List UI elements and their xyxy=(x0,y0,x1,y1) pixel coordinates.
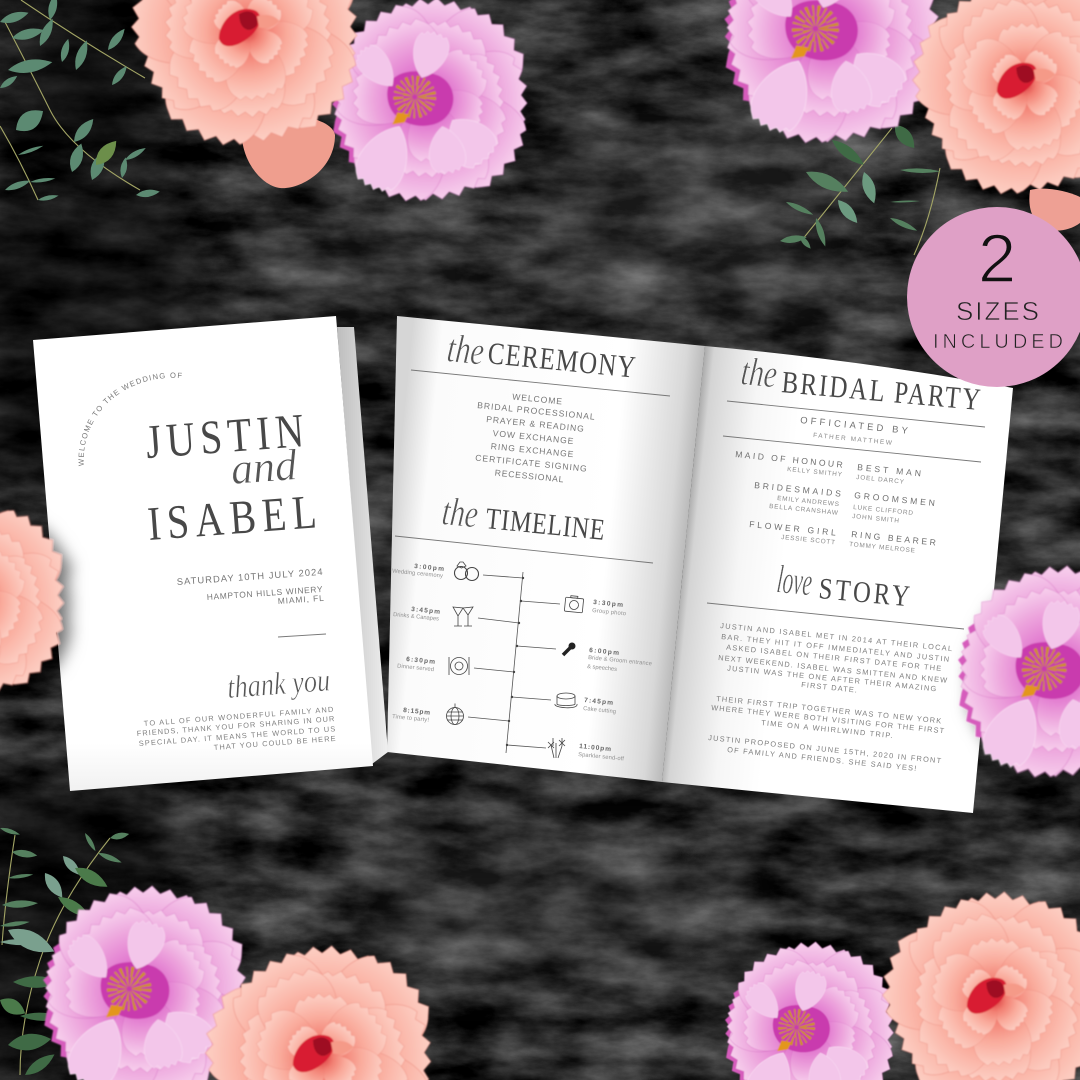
entry: 7:45pm cake cutting xyxy=(583,697,616,715)
icon: microphone xyxy=(563,642,576,655)
entry: 7:45pm cake cutting: Cake cutting xyxy=(583,706,616,715)
text block: ceremony order xyxy=(475,392,595,484)
text block: bridal party names: JESSIE SCOTT xyxy=(781,534,835,546)
entry: 11:00pm sparkler send-off: Sparkler send-off xyxy=(578,752,625,763)
text block: ceremony order: RING EXCHANGE xyxy=(490,441,574,459)
text block: thank you message: FRIENDS, THANK YOU FOR SHARING IN OUR xyxy=(136,714,335,738)
panel: front cover card xyxy=(33,316,373,791)
icon: cake xyxy=(555,693,577,708)
entry: 7:45pm cake cutting: 7:45pm xyxy=(584,697,613,707)
text block: bridal party names: BELLA CRANSHAW xyxy=(769,503,839,517)
heading: the timeline: the xyxy=(440,488,480,537)
entry: 6:30pm dinner served: Dinner served xyxy=(397,664,434,673)
text block: bridal party names: EMILY ANDREWS xyxy=(777,495,839,508)
text block: love story: NEXT WEEKEND. ISABEL WAS SMITTEN AND KNEW xyxy=(718,653,948,685)
entry: 6:00pm bride and groom entrance: Bride & Groom entrance xyxy=(588,655,652,667)
chart: wedding day timeline xyxy=(392,562,652,763)
text block: ceremony order: VOW EXCHANGE xyxy=(492,428,574,446)
text block: bridal party names: GROOMSMEN xyxy=(854,490,935,508)
heading: the bridal party xyxy=(739,348,982,418)
text block: love story: ASKED ISABEL ON THEIR FIRST DATE FOR THE xyxy=(726,643,942,673)
text block: date and venue: MIAMI, FL xyxy=(277,593,324,606)
text block: ceremony order: RECESSIONAL xyxy=(494,468,564,484)
heading: love story xyxy=(775,556,911,613)
flower: peach peony bottom left xyxy=(195,940,445,1080)
entry: 3:00pm wedding ceremony: Wedding ceremony xyxy=(392,569,443,580)
arched text: welcome to the wedding of: WELCOME TO THE WEDDING OF xyxy=(78,372,182,466)
heading: couple names: ISABEL xyxy=(146,486,318,551)
flower: peach peony bottom right xyxy=(873,886,1080,1080)
text block: thank you message: THAT YOU COULD BE HERE xyxy=(213,734,336,752)
text block: thank you message xyxy=(136,705,336,752)
heading: the ceremony: the xyxy=(445,325,486,374)
flower: pink peony bottom left xyxy=(31,880,259,1080)
heading: the bridal party: BRIDAL PARTY xyxy=(780,366,982,418)
flower: peach peony top right xyxy=(903,0,1080,208)
entry: 6:30pm dinner served: 6:30pm xyxy=(406,656,435,666)
icon: disco ball xyxy=(446,704,464,724)
heading: the timeline xyxy=(440,488,606,546)
text block: ceremony order: PRAYER & READING xyxy=(486,414,585,434)
petal: peach peony lower petal xyxy=(242,116,335,188)
badge: 2 sizes included: INCLUDED xyxy=(933,331,1063,353)
heading: the ceremony xyxy=(445,325,637,385)
entry: 3:45pm drinks and canapes: Drinks & Canapes xyxy=(393,612,439,623)
text block: bridal party names: BRIDESMAIDS xyxy=(754,480,842,499)
heading: thank you: thank you xyxy=(226,661,331,705)
heading: the timeline: TIMELINE xyxy=(484,502,606,546)
text block: bridal party names: LUKE CLIFFORD xyxy=(853,504,914,517)
badge: 2 sizes included: 2 xyxy=(978,220,1016,297)
icon: sparklers xyxy=(548,738,565,758)
text block: thank you message: TO ALL OF OUR WONDERFUL FAMILY AND xyxy=(143,705,334,728)
eucalyptus branch: top right xyxy=(779,121,941,255)
heading: love story: STORY xyxy=(817,572,911,613)
icon: cocktails xyxy=(453,607,473,626)
text block: date and venue: SATURDAY 10TH JULY 2024 xyxy=(176,566,323,587)
text block: bridal party names xyxy=(735,449,936,555)
text block: love story: JUSTIN WAS THE ONE AFTER THEIR AMAZING xyxy=(727,664,937,693)
text block: love story: TIME ON A WHIRLWIND TRIP. xyxy=(761,718,893,740)
text block: officiated by: FATHER MATTHEW xyxy=(813,432,893,447)
entry: 3:00pm wedding ceremony: 3:00pm xyxy=(414,563,444,573)
text block: love story: WHERE THEY WERE BOTH VISITING FOR THE FIRST xyxy=(711,703,945,735)
text block: love story: BAR. THEY HIT IT OFF IMMEDIATELY AND JUSTIN xyxy=(721,632,950,664)
panel: booklet left page xyxy=(387,316,705,782)
text block: love story: JUSTIN PROPOSED ON JUNE 15TH, 2020 IN FRONT xyxy=(708,733,942,765)
entry: 3:45pm drinks and canapes: 3:45pm xyxy=(411,606,440,616)
entry: 8:15pm time to party: 8:15pm xyxy=(403,707,430,717)
flower: pink peony top left xyxy=(320,0,540,214)
text block: love story: FIRST DATE. xyxy=(801,680,857,695)
text block: love story xyxy=(708,621,953,773)
entry: 8:15pm time to party: Time to party! xyxy=(392,714,430,724)
entry: 3:30pm group photo: 3:30pm xyxy=(593,599,623,609)
heading: the bridal party: the xyxy=(739,348,779,397)
text block: date and venue xyxy=(176,566,324,606)
entry: 3:45pm drinks and canapes xyxy=(393,606,440,623)
text block: love story: OF FAMILY AND FRIENDS. SHE SAID YES! xyxy=(727,745,917,773)
text block: bridal party names: JOHN SMITH xyxy=(852,513,900,525)
text block: officiated by xyxy=(800,414,909,447)
text block: bridal party names: BEST MAN xyxy=(857,462,921,478)
text block: bridal party names: MAID OF HONOUR xyxy=(735,449,843,470)
entry: 6:00pm bride and groom entrance xyxy=(587,647,652,673)
flower: peach peony left edge xyxy=(0,497,76,711)
icon: wedding rings xyxy=(454,562,478,580)
flower: pink peony bottom right xyxy=(715,937,905,1080)
flower: peach peony top left xyxy=(121,0,371,159)
text block: ceremony order: BRIDAL PROCESSIONAL xyxy=(477,400,595,422)
text block: thank you message: SPECIAL DAY. IT MEANS THE WORLD TO US xyxy=(138,724,336,748)
text block: ceremony order: WELCOME xyxy=(512,392,563,406)
flower: pink peony top right xyxy=(712,0,953,157)
heading: the ceremony: CEREMONY xyxy=(486,337,637,385)
badge: 2 sizes included xyxy=(907,207,1080,387)
petal: peach peony lower right xyxy=(1029,189,1080,231)
text block: bridal party names: TOMMY MELROSE xyxy=(849,541,915,555)
icon: plate and cutlery xyxy=(449,657,469,675)
flower: pink peony right edge xyxy=(946,560,1080,790)
booklet back page strip xyxy=(337,327,388,764)
text block: bridal party names: KELLY SMITHY xyxy=(787,466,843,479)
heading: couple names xyxy=(144,405,318,551)
text block: bridal party names: RING BEARER xyxy=(851,529,936,547)
heading: couple names: and xyxy=(229,440,300,494)
heading: love story: love xyxy=(775,556,814,604)
entry: 6:30pm dinner served xyxy=(397,656,435,673)
text block: date and venue: HAMPTON HILLS WINERY xyxy=(206,584,323,602)
entry: 8:15pm time to party xyxy=(392,707,430,724)
text block: officiated by: OFFICIATED BY xyxy=(800,414,909,436)
heading: couple names: JUSTIN xyxy=(144,405,306,469)
text block: love story: THEIR FIRST TRIP TOGETHER WAS TO NEW YORK xyxy=(716,694,942,725)
text block: bridal party names: FLOWER GIRL xyxy=(749,519,837,538)
text block: bridal party names: JOEL DARCY xyxy=(856,474,905,486)
entry: 6:00pm bride and groom entrance: & speeches xyxy=(587,664,617,673)
entry: 3:30pm group photo xyxy=(592,599,626,617)
eucalyptus branch: bottom left xyxy=(0,826,130,1079)
icon: camera xyxy=(564,595,584,613)
entry: 11:00pm sparkler send-off xyxy=(578,743,625,763)
text block: ceremony order: CERTIFICATE SIGNING xyxy=(475,453,588,474)
panel: booklet right page xyxy=(662,346,1013,813)
entry: 6:00pm bride and groom entrance: 6:00pm xyxy=(589,647,619,657)
text block: love story: JUSTIN AND ISABEL MET IN 2014 AT THEIR LOCAL xyxy=(720,621,953,653)
entry: 11:00pm sparkler send-off: 11:00pm xyxy=(579,743,611,753)
entry: 3:30pm group photo: Group photo xyxy=(592,608,626,617)
eucalyptus branch: top left xyxy=(0,0,160,202)
entry: 3:00pm wedding ceremony xyxy=(392,563,444,580)
badge: 2 sizes included: SIZES xyxy=(956,296,1039,326)
